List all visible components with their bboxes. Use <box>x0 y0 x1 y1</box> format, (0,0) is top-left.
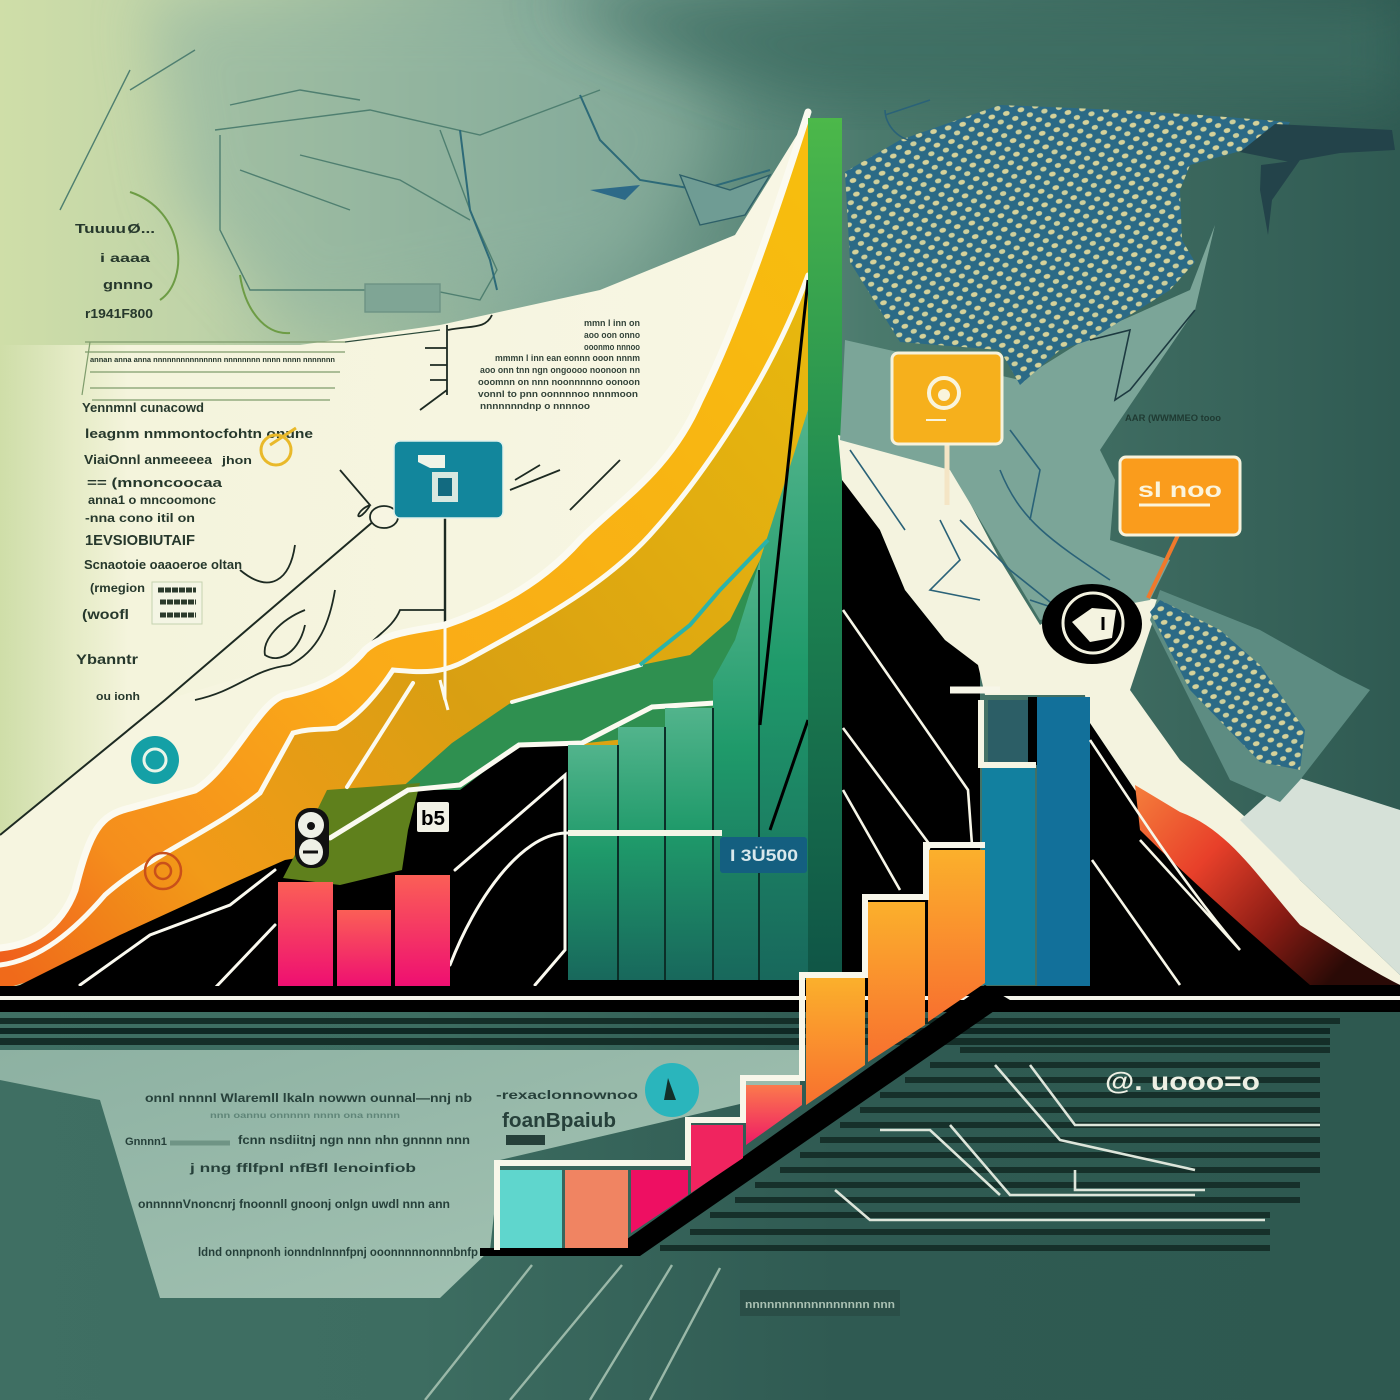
black ring icon <box>1042 584 1142 664</box>
pale shape right <box>1240 775 1400 975</box>
text block: right of paper <box>478 318 640 411</box>
text block: left column: Yennmnl cunacowd <box>82 400 204 415</box>
lower panel text: fcnn nsdiitnj ngn nnn nhn gnnnn nnn <box>238 1133 470 1147</box>
lower panel text: nnn oannu onnnnn nnnn ona nnnnn <box>210 1111 400 1120</box>
yellow scribble icon <box>261 428 296 465</box>
text block: right of paper: mmmn l inn ean eonnn ooon nnnm <box>495 353 640 363</box>
text block: left column: i aaaa <box>100 251 150 265</box>
chip: chart badge: b5 <box>421 808 445 830</box>
text block: left column: leagnm nmmontocfohtn onune <box>85 426 313 441</box>
text block: right of paper: mmn l inn on <box>584 318 640 328</box>
cream band below diagonal <box>0 660 300 960</box>
text block: left column: annan anna anna nnnnnnnnnnnnnnn nnnnnnnn nnnn nnnn nnnnnnn <box>90 357 335 364</box>
text block: left column: ViaiOnnl anmeeeea <box>84 452 213 467</box>
orange circle icon <box>145 853 181 889</box>
staircase bar chart <box>480 845 1010 1256</box>
pink bar chart <box>278 875 450 989</box>
gold lower band <box>0 275 808 990</box>
legend box <box>152 582 202 624</box>
text block: left column: -nna cono itil on <box>85 511 195 525</box>
text block: left column: r1941F800 <box>85 306 153 321</box>
green bar chart <box>568 280 808 980</box>
text block: right of paper: nnnnnnndnp o nnnnoo <box>480 401 591 411</box>
text block: left column: gnnno <box>103 277 153 292</box>
text block: left column: 1EVSIOBIUTAIF <box>85 532 195 549</box>
bottom caption chip: nnnnnnnnnnnnnnnnn nnn <box>745 1299 895 1311</box>
callout: amber with stem <box>892 353 1002 505</box>
dotted map region: north <box>845 105 1290 385</box>
black mountain base <box>0 440 1400 995</box>
blue bar chart <box>981 697 1090 987</box>
text block: left column: (woofl <box>82 606 129 622</box>
text block: left column: Tuuuu Ø... <box>75 221 155 236</box>
pale map land <box>840 225 1215 620</box>
text block: left column: Ybanntr <box>76 651 139 667</box>
pale lower panel <box>0 1050 800 1298</box>
ruled table on paper <box>82 330 440 400</box>
callout stem on band <box>440 625 448 710</box>
main orange area band <box>0 118 808 985</box>
map tracery <box>850 100 1195 610</box>
right cream slope <box>838 435 1400 985</box>
text block: left column: ou ionh <box>96 691 140 703</box>
teal drop icon <box>645 1063 699 1117</box>
top right label: @. uooo=o <box>1105 1068 1260 1096</box>
dark map tail <box>1240 124 1395 235</box>
callout: orange with label <box>1120 457 1240 598</box>
lower panel text: -rexaclonnownoo <box>496 1088 638 1102</box>
text block: left column: (rmegion <box>90 581 145 595</box>
text block: right of paper: vonnl to pnn oonnnnoo nnnmoon <box>478 389 638 399</box>
dotted map region: south <box>1150 600 1305 770</box>
text block: right of paper: ooonmo nnnoo <box>584 342 640 352</box>
lower panel text: ldnd onnpnonh ionndnlnnnfpnj ooonnnnnonnnbnfp <box>198 1245 478 1259</box>
red band <box>1135 785 1400 985</box>
teal circle icon <box>131 736 179 784</box>
circuit lines lower right <box>660 1050 1330 1248</box>
lower panel text: onnnnnVnoncnrj fnoonnll gnoonj onlgn uwdl nnn ann <box>138 1197 450 1211</box>
lower panel text: foanBpaiub <box>502 1110 616 1132</box>
white lines on black mountain <box>843 610 1240 985</box>
blue chart label: I 3Ü500 <box>730 846 798 865</box>
text block: right of paper: aoo oon onno <box>584 330 640 340</box>
callout: teal <box>394 441 503 518</box>
green spike <box>808 118 842 985</box>
map caption: AAR (WWMMEO tooo <box>1125 413 1222 423</box>
lower panel text: Gnnnn1 <box>125 1136 167 1148</box>
text block: right of paper: aoo onn tnn ngn ongoooo noonoon nn <box>480 365 640 375</box>
diagonal lines bottom <box>425 1265 720 1400</box>
text block: left column: jhon <box>221 455 252 467</box>
chip: chart badge <box>417 802 449 832</box>
green band <box>345 410 808 838</box>
scribble branches on paper <box>0 315 680 835</box>
bottom caption chip <box>740 1290 900 1316</box>
callout: orange with label: sl noo <box>1138 479 1222 502</box>
lower panel text: j nng fflfpnl nfBfl lenoinfiob <box>189 1161 416 1175</box>
text block: left column: anna1 o mncoomonc <box>88 493 216 507</box>
cream paper panel <box>0 130 800 970</box>
band dividers <box>0 112 808 988</box>
southern land <box>1150 590 1370 802</box>
blue chart label <box>720 837 807 873</box>
lower panel text: onnl nnnnl Wlaremll lkaln nowwn ounnal—nnj nb <box>145 1091 472 1105</box>
text block: left column <box>75 221 335 703</box>
map outline sketch: upper left <box>60 50 770 333</box>
olive slope <box>283 783 420 885</box>
lower panel text <box>125 1088 638 1259</box>
chip: rounded badge <box>295 808 329 868</box>
text block: left column: Scnaotoie oaaoeroe oltan <box>84 557 242 572</box>
ground axis band <box>0 986 1400 1045</box>
text block: left column: == (mnoncoocaa <box>87 475 223 490</box>
text block: right of paper: ooomnn on nnn noonnnnno oonoon <box>478 377 640 387</box>
